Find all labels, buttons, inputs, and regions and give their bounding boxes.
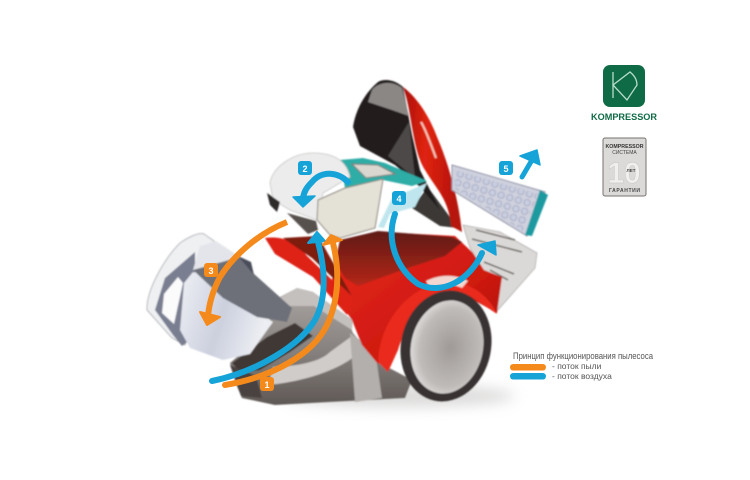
- badge years: ЛЕТ: [627, 168, 636, 173]
- 10 year warranty badge: [603, 138, 646, 196]
- dark lower cylinder edge: [287, 213, 318, 234]
- pale blue filter: [378, 183, 427, 228]
- floor shadow: [285, 385, 515, 407]
- white cylinder: [270, 153, 350, 220]
- cup handle shell: [147, 233, 214, 345]
- badge heading: KOMPRESSOR: [606, 144, 644, 150]
- body light strip: [280, 288, 353, 330]
- legend title: Принцип функционирования пылесоса: [513, 351, 653, 361]
- step badge 5: [499, 161, 513, 175]
- beige box: [317, 179, 383, 238]
- cup grey handle: [155, 252, 195, 346]
- wheel arch highlight: [426, 276, 468, 289]
- step badge 4: 4: [396, 194, 402, 204]
- rear plate: [463, 225, 537, 311]
- filter mesh: [455, 170, 538, 231]
- red flap: [265, 238, 353, 315]
- filter teal edge: [525, 190, 548, 236]
- air flow arrow 5: [520, 150, 540, 177]
- step badge 4: [392, 191, 406, 205]
- Kompressor logo: [591, 65, 657, 123]
- air flow arrow 4: [392, 214, 496, 288]
- badge number: 10: [607, 157, 641, 190]
- cup lid band: [193, 257, 292, 322]
- logo wordmark: KOMPRESSOR: [591, 112, 657, 123]
- step badge 1: 1: [264, 380, 270, 390]
- flow arrows: [200, 150, 540, 385]
- hose socket highlight: [268, 336, 355, 385]
- dark nozzle cavity: [232, 323, 313, 372]
- dust flow arrow 1: [225, 235, 342, 385]
- nozzle base: [230, 365, 262, 398]
- lid red shell: [403, 87, 462, 232]
- air flow swatch: [510, 373, 546, 380]
- vacuum cleaner illustration: [147, 80, 548, 410]
- air flow arrow 2: [293, 174, 348, 207]
- step badge 3: 3: [208, 266, 214, 276]
- step badge 5: 5: [503, 164, 509, 174]
- cup bowl: [180, 272, 273, 360]
- dust flow arrow 3: [200, 222, 287, 325]
- filter frame: [452, 165, 545, 236]
- dust flow swatch: [510, 364, 546, 370]
- step badge 1: [260, 377, 274, 391]
- logo icon: [603, 65, 645, 107]
- cup lid edge: [238, 256, 254, 275]
- body vertical band: [350, 333, 382, 402]
- dust flow label: - поток пыли: [552, 361, 602, 371]
- step badge 2: [298, 161, 312, 175]
- tray opening: [352, 164, 395, 178]
- dark red flap interior: [283, 236, 352, 296]
- lid shine: [421, 122, 436, 158]
- lid inner: [353, 80, 440, 210]
- badge subheading: СИСТЕМА: [612, 150, 637, 156]
- wheel: [390, 282, 502, 410]
- wheel hub: [402, 294, 492, 400]
- dark clamp: [267, 193, 280, 212]
- lid mechanism: [412, 172, 458, 228]
- air flow arrow 1: [212, 232, 325, 381]
- dust cup: [147, 233, 292, 360]
- lid lower grey panel: [388, 122, 415, 178]
- step badge 2: 2: [302, 164, 308, 174]
- cup handle opening: [162, 277, 183, 324]
- red body: [332, 232, 502, 364]
- dust container assembly: [267, 153, 427, 238]
- cup upper wall: [193, 241, 240, 285]
- lid: [353, 80, 462, 232]
- air flow label: - поток воздуха: [552, 371, 612, 381]
- step badge 3: [204, 263, 218, 277]
- red interior cavity: [335, 231, 462, 286]
- red wheel housing arc: [378, 281, 497, 372]
- lower body shell: [230, 288, 412, 405]
- badge footer: ГАРАНТИИ: [609, 188, 640, 194]
- rear plate detail: [472, 230, 522, 280]
- lid grey top: [368, 83, 409, 116]
- legend: [510, 351, 653, 381]
- exhaust filter: [452, 165, 548, 236]
- teal tray: [340, 158, 427, 188]
